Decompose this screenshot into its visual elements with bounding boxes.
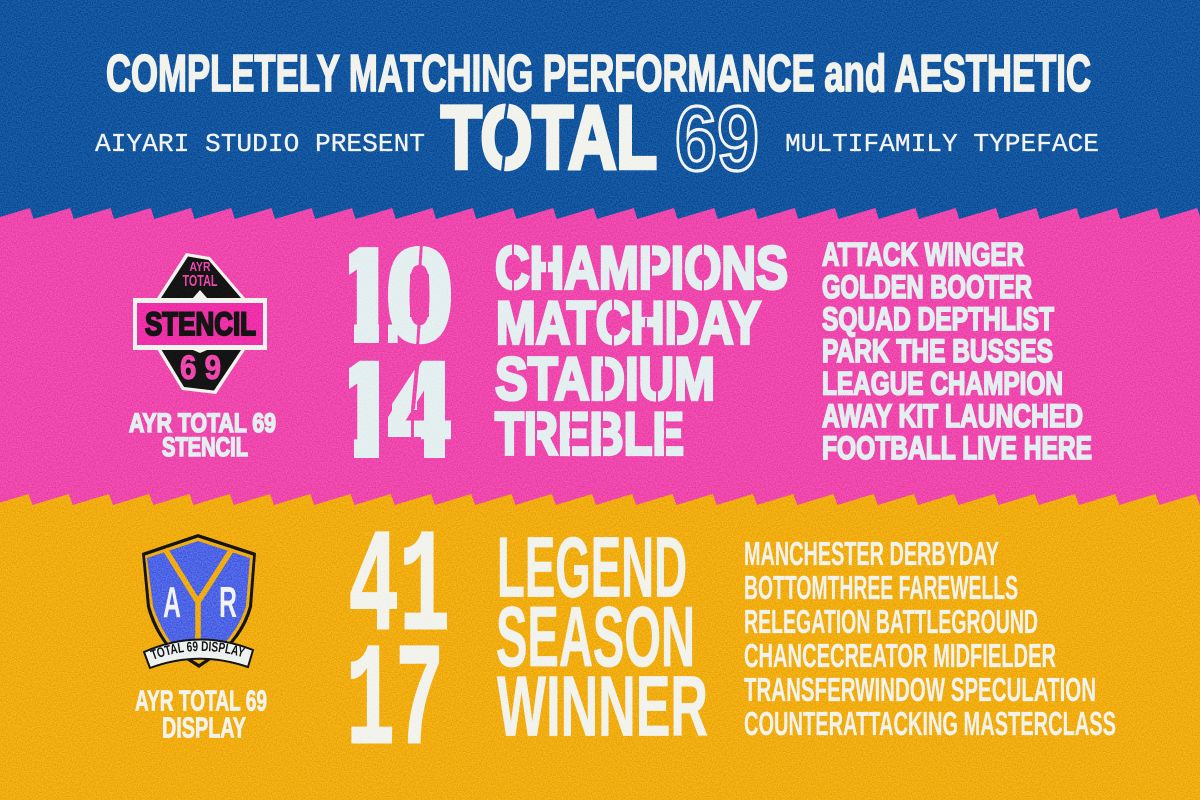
badge: stencil 69: AYR xyxy=(190,259,211,274)
caption: display family name: DISPLAY xyxy=(162,712,246,744)
stencil list: AWAY KIT LAUNCHED xyxy=(822,398,1083,434)
caption: stencil family name: AYR TOTAL 69 xyxy=(129,408,276,438)
display words: SEASON xyxy=(496,590,695,685)
stencil list: SQUAD DEPTHLIST xyxy=(822,301,1054,337)
panel: stencil content xyxy=(129,222,1092,484)
display list xyxy=(744,535,1116,742)
badge: AYR shield: A xyxy=(163,578,181,627)
subtitle left: AIYARI STUDIO PRESENT xyxy=(95,129,425,159)
badge: AYR shield: TOTAL 69 DISPLAY xyxy=(150,641,246,660)
display list: BOTTOMTHREE FAREWELLS xyxy=(744,569,1018,606)
subtitle right: MULTIFAMILY TYPEFACE xyxy=(785,129,1099,159)
stencil words: CHAMPIONS xyxy=(495,234,788,302)
stencil words xyxy=(495,234,788,468)
stencil list: LEAGUE CHAMPION xyxy=(822,366,1063,402)
badge: stencil 69: TOTAL xyxy=(182,273,218,290)
stencil words: TREBLE xyxy=(495,400,684,468)
stencil list: ATTACK WINGER xyxy=(822,236,1024,272)
stencil list xyxy=(822,236,1092,466)
badge: AYR shield: R xyxy=(219,578,237,627)
wordmark: TOTAL: TOTAL xyxy=(441,87,657,187)
badge: stencil 69: 6 9 xyxy=(180,349,221,387)
badge: stencil 69 xyxy=(133,253,267,394)
caption: display family name: AYR TOTAL 69 xyxy=(135,686,267,718)
numerals: 17: 17 xyxy=(346,620,444,786)
numerals: 10: 10 xyxy=(331,222,454,369)
numerals: 41: 41 xyxy=(348,506,450,672)
stencil words: MATCHDAY xyxy=(496,288,761,356)
badge: AYR shield xyxy=(142,534,256,670)
badge: stencil 69: STENCIL xyxy=(145,306,256,342)
stencil list: GOLDEN BOOTER xyxy=(822,269,1032,305)
display words: WINNER xyxy=(497,660,708,754)
stencil list: FOOTBALL LIVE HERE xyxy=(822,430,1092,466)
header block xyxy=(95,44,1099,190)
panel: display content xyxy=(135,506,1116,786)
caption: stencil family name xyxy=(129,408,276,462)
panel: pink stencil band with sawtooth edge xyxy=(0,208,1200,800)
caption: display family name xyxy=(135,686,267,744)
stencil words: STADIUM xyxy=(495,344,715,412)
display list: MANCHESTER DERBYDAY xyxy=(744,535,999,572)
panel: yellow display band with sawtooth edge xyxy=(0,494,1200,800)
caption: stencil family name: STENCIL xyxy=(162,432,248,462)
stencil list: PARK THE BUSSES xyxy=(822,333,1053,369)
display words: LEGEND xyxy=(497,520,687,616)
wordmark: 69 outlined: 69 xyxy=(675,88,759,190)
numerals: 14: 14 xyxy=(331,335,455,484)
display words xyxy=(496,520,708,754)
